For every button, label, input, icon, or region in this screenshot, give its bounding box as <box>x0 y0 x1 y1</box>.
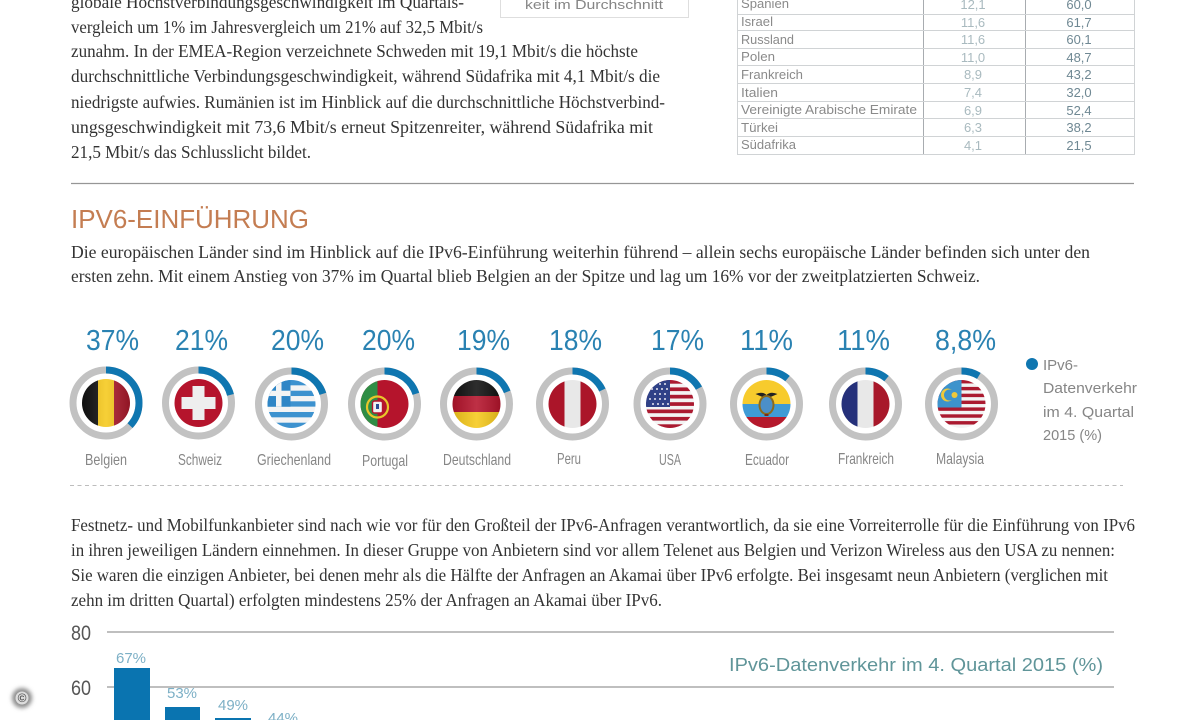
text block: IPv6 intro <box>71 242 1090 286</box>
table: Verbindungsgeschwindigkeit nach Land: Israel <box>741 14 773 29</box>
country: Portugal: Portugal <box>362 453 408 470</box>
table: Verbindungsgeschwindigkeit nach Land: 38,2 <box>1066 120 1092 135</box>
country: Griechenland <box>257 325 331 469</box>
country: Malaysia: 8,8% <box>935 325 996 357</box>
table: Verbindungsgeschwindigkeit nach Land: 52,4 <box>1066 103 1092 118</box>
table: Verbindungsgeschwindigkeit nach Land: 11,6 <box>961 15 985 30</box>
callout box <box>500 0 688 18</box>
country: Griechenland: Griechenland <box>257 452 331 469</box>
table: Verbindungsgeschwindigkeit nach Land: Polen <box>741 49 775 64</box>
country: USA <box>637 325 704 469</box>
table: Verbindungsgeschwindigkeit nach Land: Vereinigte Arabische Emirate <box>741 102 917 117</box>
legend: IPv6- <box>1043 357 1078 374</box>
table: Verbindungsgeschwindigkeit nach Land: Frankreich <box>741 67 803 82</box>
table: Verbindungsgeschwindigkeit nach Land: 32,0 <box>1066 85 1092 100</box>
country: Schweiz <box>166 325 232 469</box>
table: Verbindungsgeschwindigkeit nach Land: 6,3 <box>964 120 982 135</box>
legend <box>1026 357 1137 444</box>
bar chart: IPv6-Datenverkehr: 80 <box>71 622 91 645</box>
country: USA: 17% <box>651 325 704 357</box>
table: Verbindungsgeschwindigkeit nach Land: 7,4 <box>964 85 982 100</box>
table: Verbindungsgeschwindigkeit nach Land: 8,9 <box>964 67 982 82</box>
table: Verbindungsgeschwindigkeit nach Land: Russland <box>741 32 794 47</box>
bar chart: IPv6-Datenverkehr <box>71 622 1114 720</box>
bar chart: IPv6-Datenverkehr: 53% <box>167 685 197 702</box>
country: Peru <box>540 325 606 468</box>
country: Frankreich <box>832 325 898 468</box>
table: Verbindungsgeschwindigkeit nach Land: Italien <box>741 85 778 100</box>
country: Peru: Peru <box>557 451 581 468</box>
legend: im 4. Quartal <box>1043 404 1134 421</box>
country: Deutschland <box>443 325 511 469</box>
country: Ecuador <box>734 325 800 469</box>
icon: copyright <box>12 688 32 708</box>
table: Verbindungsgeschwindigkeit nach Land: 60,1 <box>1066 32 1092 47</box>
text block: IPv6 intro: Die europäischen Länder sind im Hinblick auf die IPv6-Einführung weiterhin führend – allein sechs europäische Länder befinden sich unter den <box>71 242 1090 262</box>
bar chart: IPv6-Datenverkehr: IPv6-Datenverkehr im 4. Quartal 2015 (%) <box>729 654 1103 675</box>
country: Belgien: Belgien <box>85 452 127 469</box>
text block: IPv6 intro: ersten zehn. Mit einem Anstieg von 37% im Quartal blieb Belgien an der Spitze und lag um 16% vor der zweitplatzierten Schweiz. <box>71 266 980 286</box>
table: Verbindungsgeschwindigkeit nach Land: Südafrika <box>741 137 797 152</box>
country: Portugal <box>352 325 418 470</box>
text block: Verbindungsgeschwindigkeit <box>71 0 665 162</box>
table: Verbindungsgeschwindigkeit nach Land: 6,9 <box>964 103 982 118</box>
table: Verbindungsgeschwindigkeit nach Land: 48,7 <box>1066 50 1092 65</box>
country: Deutschland: Deutschland <box>443 452 511 469</box>
heading: IPv6-Einführung: IPV6-EINFÜHRUNG <box>71 204 309 234</box>
icon: copyright: © <box>18 691 27 705</box>
bar chart: IPv6-Datenverkehr: 60 <box>71 677 91 700</box>
text block: Verbindungsgeschwindigkeit: zunahm. In der EMEA-Region verzeichnete Schweden mit 19,1 Mbit/s die höchste <box>71 41 638 61</box>
text block: Verbindungsgeschwindigkeit: durchschnittliche Verbindungsgeschwindigkeit, während Südafrika mit 4,1 Mbit/s die <box>71 66 660 86</box>
legend: Datenverkehr <box>1043 380 1137 397</box>
bar chart: IPv6-Datenverkehr: 67% <box>116 650 146 667</box>
country: Schweiz: 21% <box>175 325 228 357</box>
country: Peru: 18% <box>549 325 602 357</box>
country: Malaysia: Malaysia <box>936 451 984 468</box>
text block: Anbieter <box>71 515 1135 610</box>
country: Frankreich: Frankreich <box>838 451 894 468</box>
table: Verbindungsgeschwindigkeit nach Land: 61,7 <box>1066 15 1092 30</box>
legend: 2015 (%) <box>1043 427 1102 444</box>
table: Verbindungsgeschwindigkeit nach Land: 11,6 <box>961 32 985 47</box>
text block: Anbieter: Festnetz- und Mobilfunkanbieter sind nach wie vor für den Großteil der IPv6-Anfragen verantwortlich, da sie eine Vorreiterrolle für die Einführung von IPv6 <box>71 515 1135 535</box>
bar chart: IPv6-Datenverkehr: 49% <box>218 697 248 714</box>
country: Ecuador: 11% <box>740 325 793 357</box>
table: Verbindungsgeschwindigkeit nach Land: Türkei <box>741 120 778 135</box>
text block: Verbindungsgeschwindigkeit: ungsgeschwindigkeit mit 73,6 Mbit/s erneut Spitzenreiter, während Südafrika mit <box>71 117 653 137</box>
country: Frankreich: 11% <box>837 325 890 357</box>
text block: Anbieter: in ihren jeweiligen Ländern einnehmen. In dieser Gruppe von Anbietern sind vor allem Telenet aus Belgien und Verizon Wireless aus den USA zu nennen: <box>71 540 1115 560</box>
table: Verbindungsgeschwindigkeit nach Land: 11,0 <box>961 50 985 65</box>
country: Schweiz: Schweiz <box>178 452 222 469</box>
country: USA: USA <box>659 452 681 469</box>
table: Verbindungsgeschwindigkeit nach Land: 4,1 <box>964 138 982 153</box>
table: Verbindungsgeschwindigkeit nach Land: 21,5 <box>1066 138 1092 153</box>
text block: Anbieter: zehn im dritten Quartal) erfolgten mindestens 25% der Anfragen an Akamai über IPv6. <box>71 590 662 610</box>
text block: Verbindungsgeschwindigkeit: 21,5 Mbit/s das Schlusslicht bildet. <box>71 142 311 162</box>
country: Deutschland: 19% <box>457 325 510 357</box>
country: Belgien: 37% <box>86 325 139 357</box>
table: Verbindungsgeschwindigkeit nach Land <box>737 0 1135 154</box>
text block: Verbindungsgeschwindigkeit: niedrigste aufwies. Rumänien ist im Hinblick auf die durchschnittliche Höchstverbind- <box>71 92 665 112</box>
country: Belgien <box>73 325 139 469</box>
table: Verbindungsgeschwindigkeit nach Land: 43,2 <box>1066 67 1092 82</box>
country: Portugal: 20% <box>362 325 415 357</box>
country: Griechenland: 20% <box>271 325 324 357</box>
country: Malaysia <box>928 325 996 468</box>
text block: Verbindungsgeschwindigkeit: vergleich um 1% im Jahresvergleich um 21% auf 32,5 Mbit/s <box>71 17 483 37</box>
country: Ecuador: Ecuador <box>745 452 789 469</box>
text block: Anbieter: Sie waren die einzigen Anbieter, bei denen mehr als die Hälfte der Anfragen an Akamai über IPv6 erfolgte. Bei insgesamt neun Anbietern (verglichen mit <box>71 565 1108 585</box>
